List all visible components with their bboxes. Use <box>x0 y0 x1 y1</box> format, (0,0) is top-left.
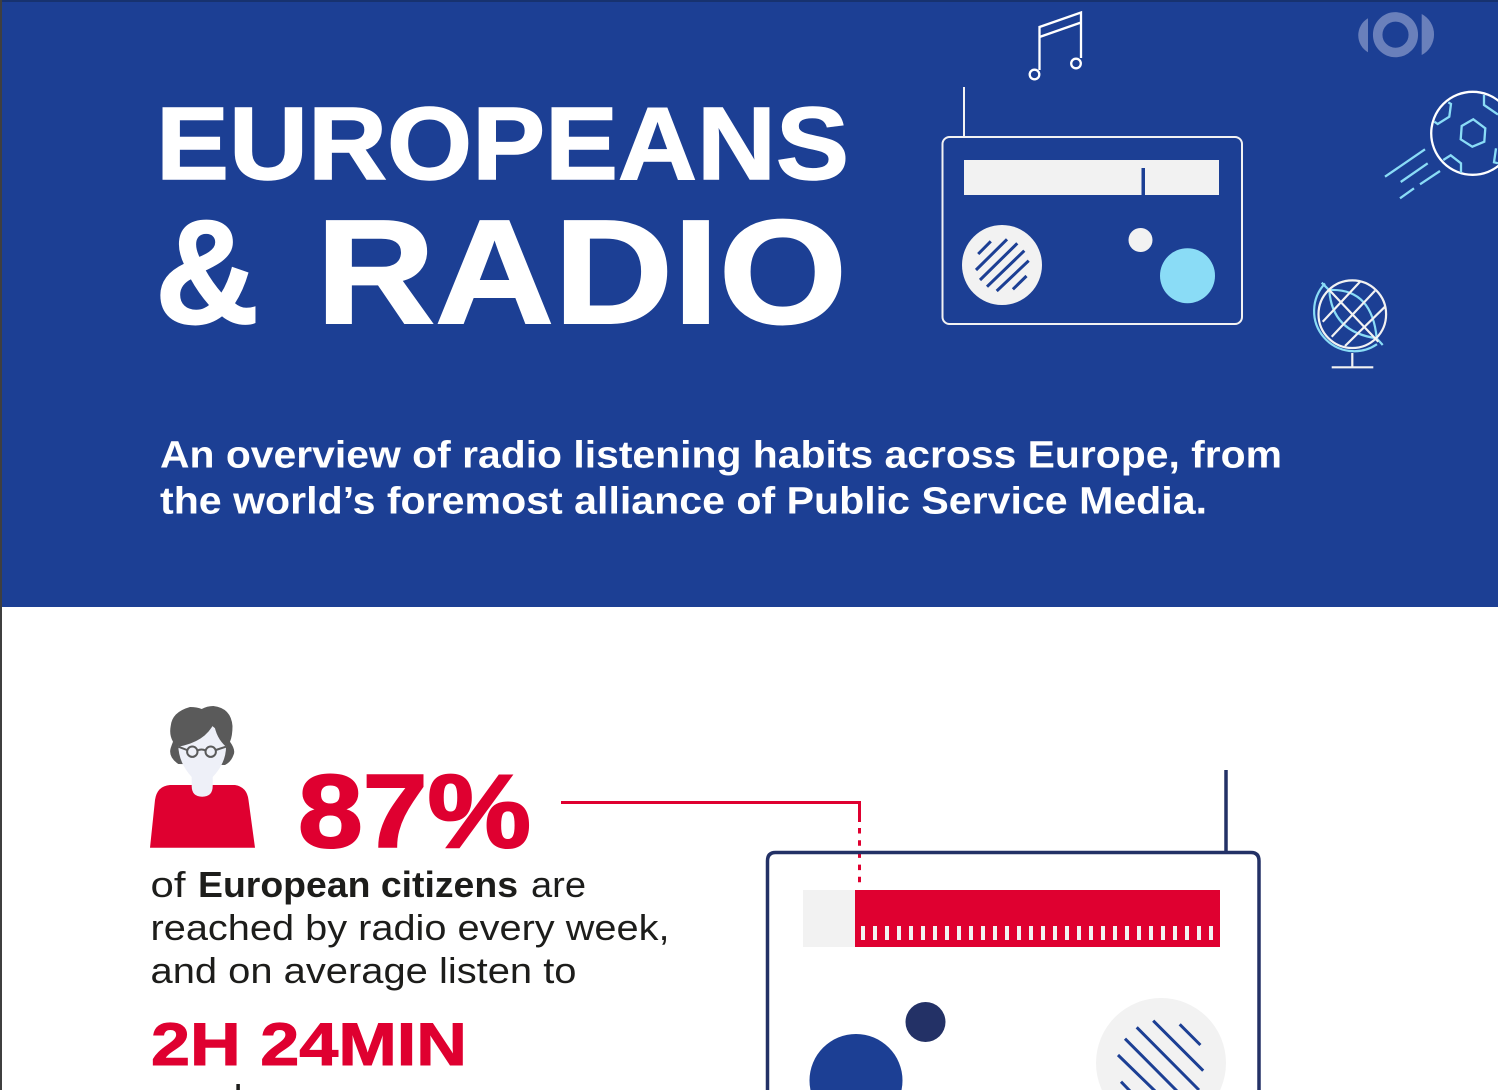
subtitle text block: the world’s foremost alliance of Public Service Media. <box>160 480 1207 522</box>
title <box>155 86 849 355</box>
title: & <box>155 190 259 355</box>
text block: reach description: European citizens <box>198 864 518 905</box>
text block: reach description: of <box>150 864 187 905</box>
icon: football <box>1385 92 1498 198</box>
icon: logo mark <box>1358 14 1434 55</box>
text block: reach description: reached by radio every week, <box>150 907 670 948</box>
icon: header radio <box>942 87 1242 324</box>
radio dial showing 87 percent <box>803 890 1220 947</box>
icon: music note <box>1030 12 1081 79</box>
subtitle text block <box>160 434 1282 522</box>
big stat 2H 24MIN: 2H 24MIN <box>151 1011 467 1078</box>
title: RADIO <box>316 190 847 355</box>
text block: reach description <box>150 864 670 991</box>
panel: blue header background <box>0 0 1498 607</box>
icon: person with glasses <box>150 706 255 848</box>
icon: globe <box>1314 280 1386 367</box>
connector line from stat to radio dial <box>561 802 860 884</box>
icon: large radio <box>768 770 1259 1090</box>
text block: reach description: are <box>531 864 586 905</box>
title: EUROPEANS <box>156 86 849 201</box>
subtitle text block: An overview of radio listening habits across Europe, from <box>160 434 1282 476</box>
text block: reach description: and on average listen to <box>150 950 576 991</box>
big stat 87%: 87% <box>298 754 531 870</box>
